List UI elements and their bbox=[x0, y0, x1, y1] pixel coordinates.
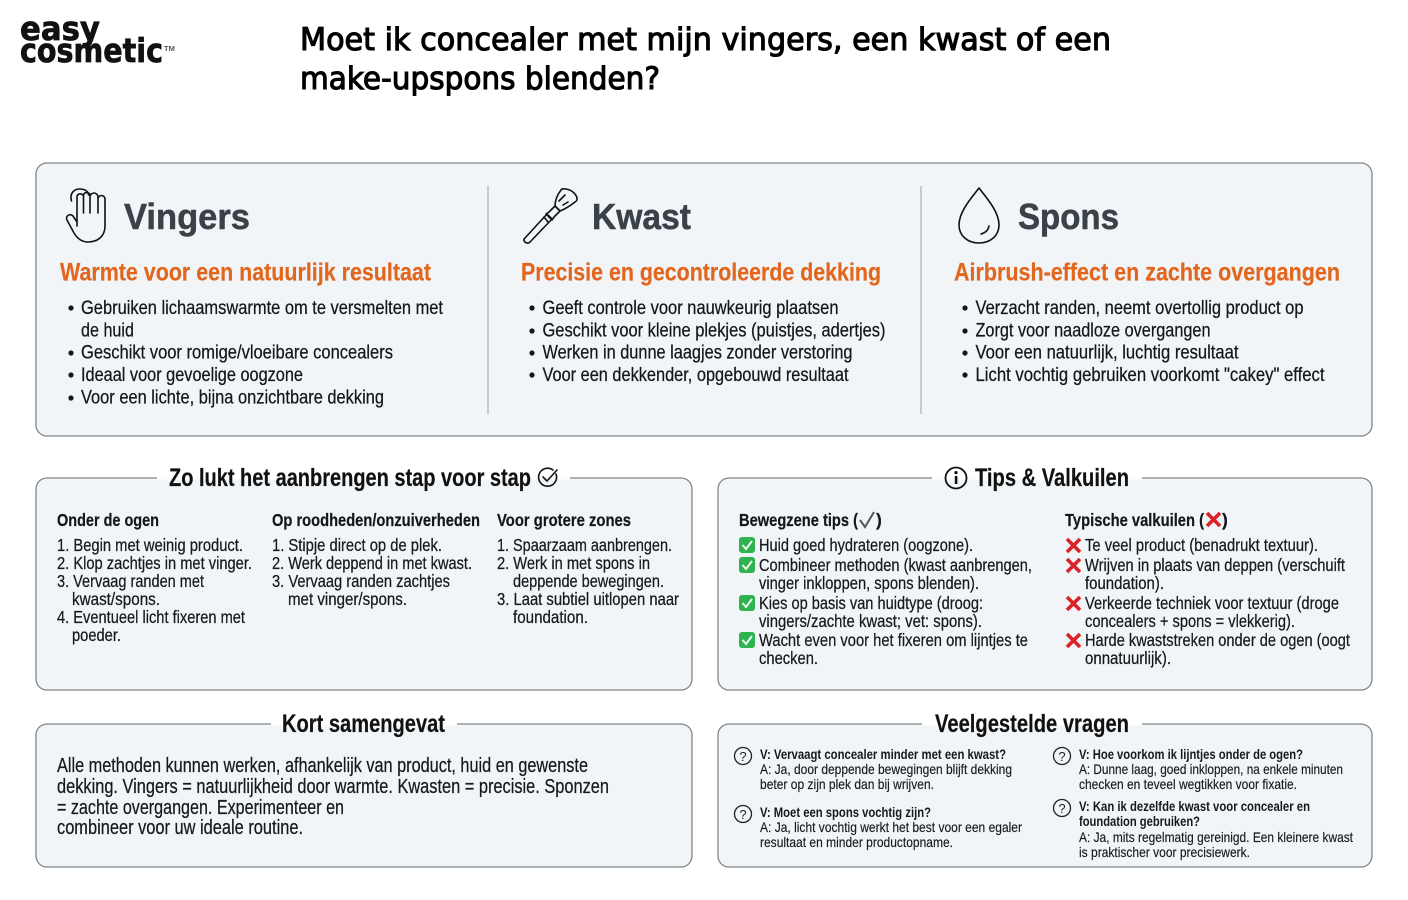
column: Kwast bbox=[521, 189, 886, 386]
column: proven tips bbox=[739, 510, 1032, 668]
column: pitfalls: foundation). bbox=[1085, 573, 1164, 593]
column: redness: 3. Vervaag randen zachtjes bbox=[272, 571, 450, 591]
panel: methods bbox=[36, 163, 1372, 436]
title: make-upspons blenden? bbox=[300, 61, 660, 97]
icon: check circle bbox=[539, 468, 557, 486]
FAQ: right column: V: Kan ik dezelfde kwast voor concealer en bbox=[1079, 798, 1310, 814]
heading: Kwast: Kwast bbox=[592, 196, 691, 237]
title: Moet ik concealer met mijn vingers, een kwast of een bbox=[300, 22, 1111, 58]
column: larger zones: 1. Spaarzaam aanbrengen. bbox=[497, 535, 672, 555]
FAQ: left column: V: Vervaagt concealer minder met een kwast? bbox=[760, 746, 1006, 762]
FAQ: right column: A: Dunne laag, goed inkloppen, na enkele minuten bbox=[1079, 761, 1343, 777]
list: Spons: Voor een natuurlijk, luchtig resultaat bbox=[976, 342, 1239, 364]
column: redness: 1. Stipje direct op de plek. bbox=[272, 535, 442, 555]
column: proven tips: Bewegzene tips ( bbox=[739, 510, 858, 530]
FAQ: left column bbox=[760, 746, 1022, 850]
logo: easy bbox=[20, 9, 100, 48]
heading: steps: Zo lukt het aanbrengen stap voor stap bbox=[169, 464, 531, 492]
column: proven tips: Huid goed hydrateren (oogzone). bbox=[759, 535, 973, 555]
text: summary: = zachte overgangen. Experimenteer en bbox=[57, 797, 344, 819]
column: pitfalls: Te veel product (benadrukt textuur). bbox=[1085, 535, 1318, 555]
column: larger zones: 2. Werk in met spons in bbox=[497, 553, 650, 573]
heading: summary: Kort samengevat bbox=[282, 710, 446, 738]
panel: summary bbox=[36, 710, 692, 867]
column: Spons bbox=[954, 188, 1340, 386]
icons: question marks: ? bbox=[739, 749, 747, 764]
column: pitfalls: Verkeerde techniek voor textuur (droge bbox=[1085, 593, 1339, 613]
icons: question marks: ? bbox=[1058, 801, 1066, 816]
list: Vingers bbox=[68, 298, 444, 408]
list: Spons: Licht vochtig gebruiken voorkomt "cakey" effect bbox=[976, 365, 1325, 386]
column: proven tips: Combineer methoden (kwast aanbrengen, bbox=[759, 555, 1032, 575]
FAQ: right column: V: Hoe voorkom ik lijntjes onder de ogen? bbox=[1079, 746, 1303, 762]
column: under the eyes bbox=[57, 510, 252, 645]
logo: TM bbox=[164, 46, 175, 53]
logo: cosmetic bbox=[20, 31, 163, 70]
column: proven tips: ) bbox=[876, 510, 882, 530]
column: proven tips: vingers/zachte kwast; vet: spons). bbox=[759, 611, 982, 631]
FAQ: left column: V: Moet een spons vochtig zijn? bbox=[760, 804, 931, 820]
column: under the eyes: 4. Eventueel licht fixeren met bbox=[57, 607, 245, 627]
column: pitfalls: ) bbox=[1222, 510, 1228, 530]
column: pitfalls: concealers + spons = vlekkerig). bbox=[1085, 611, 1295, 631]
column: proven tips: Wacht even voor het fixeren om lijntjes te bbox=[759, 630, 1028, 650]
text: summary: dekking. Vingers = natuurlijkheid door warmte. Kwasten = precisie. Sponzen bbox=[57, 776, 609, 798]
column: pitfalls: onnatuurlijk). bbox=[1085, 648, 1171, 668]
column: larger zones: deppende bewegingen. bbox=[513, 571, 664, 591]
column: under the eyes: Onder de ogen bbox=[57, 510, 159, 530]
subheading: Kwast: Precisie en gecontroleerde dekking bbox=[521, 258, 881, 286]
heading: FAQ: Veelgestelde vragen bbox=[935, 710, 1129, 738]
column: under the eyes: 1. Begin met weinig product. bbox=[57, 535, 243, 555]
column: larger zones bbox=[497, 510, 679, 627]
text: summary: Alle methoden kunnen werken, afhankelijk van product, huid en gewenste bbox=[57, 755, 588, 777]
subheading: Spons: Airbrush-effect en zachte overgangen bbox=[954, 258, 1340, 286]
list: Vingers: Voor een lichte, bijna onzichtbare dekking bbox=[81, 388, 384, 408]
list: Spons bbox=[962, 298, 1325, 386]
panel: FAQ bbox=[718, 710, 1372, 867]
column: Vingers bbox=[60, 189, 444, 408]
icon: hand bbox=[67, 189, 105, 242]
logo bbox=[20, 9, 175, 70]
icons: question marks bbox=[734, 748, 1070, 822]
heading: Vingers: Vingers bbox=[124, 196, 250, 237]
FAQ: right column: checken en teveel wegtikken voor fixatie. bbox=[1079, 776, 1297, 792]
FAQ: right column: is praktischer voor precisiewerk. bbox=[1079, 844, 1250, 860]
column: redness: met vinger/spons. bbox=[288, 589, 407, 609]
text: summary: combineer voor uw ideale routine. bbox=[57, 817, 303, 839]
column: under the eyes: poeder. bbox=[72, 625, 121, 645]
column: larger zones: foundation. bbox=[513, 607, 588, 627]
heading: Spons: Spons bbox=[1018, 196, 1119, 237]
column: redness bbox=[272, 510, 480, 609]
title bbox=[300, 22, 1111, 97]
column: larger zones: 3. Laat subtiel uitlopen naar bbox=[497, 589, 679, 609]
column: proven tips: Kies op basis van huidtype (droog: bbox=[759, 593, 983, 613]
FAQ: left column: A: Ja, door deppende bewegingen blijft dekking bbox=[760, 761, 1012, 777]
column: larger zones: Voor grotere zones bbox=[497, 510, 631, 530]
list: Vingers: Geschikt voor romige/vloeibare concealers bbox=[81, 342, 393, 364]
icons: question marks: ? bbox=[739, 807, 747, 822]
column: under the eyes: 3. Vervaag randen met bbox=[57, 571, 204, 591]
column: redness: 2. Werk deppend in met kwast. bbox=[272, 553, 472, 573]
FAQ: left column: A: Ja, licht vochtig werkt het best voor een egaler bbox=[760, 819, 1022, 835]
list: Kwast bbox=[529, 298, 886, 386]
column: under the eyes: 2. Klop zachtjes in met vinger. bbox=[57, 553, 252, 573]
column: pitfalls: Harde kwaststreken onder de ogen (oogt bbox=[1085, 630, 1350, 650]
list: Kwast: Geeft controle voor nauwkeurig plaatsen bbox=[542, 298, 838, 319]
column: pitfalls: Wrijven in plaats van deppen (verschuift bbox=[1085, 555, 1345, 575]
heading: tips: Tips & Valkuilen bbox=[975, 464, 1129, 492]
list: Spons: Zorgt voor naadloze overgangen bbox=[976, 320, 1210, 342]
FAQ: left column: beter op zijn plek dan bij wrijven. bbox=[760, 776, 934, 792]
text: summary bbox=[57, 755, 609, 839]
FAQ: right column bbox=[1079, 746, 1353, 860]
icons: question marks: ? bbox=[1058, 749, 1066, 764]
FAQ: right column: foundation gebruiken? bbox=[1079, 813, 1200, 829]
icon: sponge drop bbox=[959, 188, 999, 243]
list: Kwast: Werken in dunne laagjes zonder verstoring bbox=[542, 342, 852, 364]
list: Vingers: Gebruiken lichaamswarmte om te versmelten met bbox=[81, 298, 444, 319]
list: Vingers: Ideaal voor gevoelige oogzone bbox=[81, 365, 303, 386]
icon: info bbox=[946, 468, 966, 488]
list: Spons: Verzacht randen, neemt overtollig product op bbox=[976, 298, 1304, 319]
column: proven tips: vinger inkloppen, spons blenden). bbox=[759, 573, 979, 593]
FAQ: left column: resultaat en minder productopname. bbox=[760, 834, 953, 850]
column: redness: Op roodheden/onzuiverheden bbox=[272, 510, 480, 530]
list: Kwast: Geschikt voor kleine plekjes (puistjes, adertjes) bbox=[542, 320, 886, 342]
panel: steps bbox=[36, 464, 692, 690]
column: proven tips: checken. bbox=[759, 648, 818, 668]
column: under the eyes: kwast/spons. bbox=[72, 589, 160, 609]
column: pitfalls: Typische valkuilen ( bbox=[1065, 510, 1204, 530]
panel: tips and pitfalls bbox=[718, 464, 1372, 690]
column: pitfalls bbox=[1065, 510, 1350, 668]
list: Kwast: Voor een dekkender, opgebouwd resultaat bbox=[542, 365, 849, 386]
icon: brush bbox=[524, 189, 577, 243]
FAQ: right column: A: Ja, mits regelmatig gereinigd. Een kleinere kwast bbox=[1079, 829, 1353, 845]
list: Vingers: de huid bbox=[81, 320, 134, 342]
subheading: Vingers: Warmte voor een natuurlijk resultaat bbox=[60, 258, 432, 286]
